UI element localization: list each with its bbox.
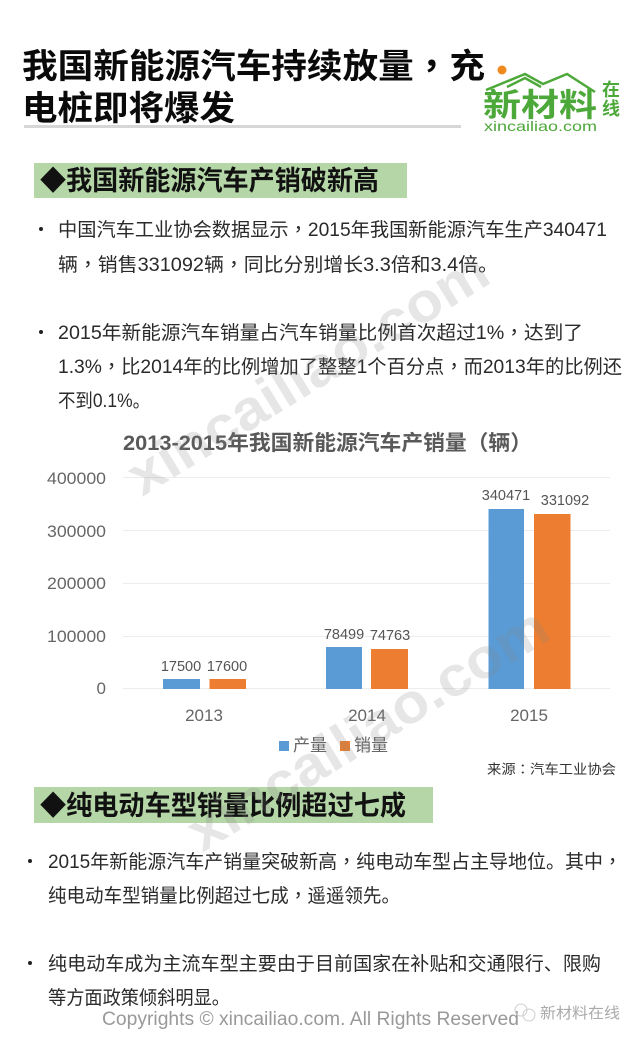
y axis labels: [47, 469, 106, 698]
data labels: 17500: [161, 659, 201, 675]
wechat source mark: 新材料在线: [540, 1005, 620, 1022]
data labels: [161, 488, 589, 675]
copyright footer: Copyrights © xincailiao.com. All Rights Reserved: [102, 1009, 519, 1030]
text block: market share: 1.3%，比2014年的比例增加了整整1个百分点，而2013年的比例还: [58, 352, 622, 379]
text block: market share: 2015年新能源汽车销量占汽车销量比例首次超过1% ，达到了: [58, 318, 583, 345]
section heading 2: ◆纯电动车型销量比例超过七成: [40, 791, 406, 821]
text block: policy reasons: 等方面政策倾斜明显。: [48, 987, 230, 1009]
data labels: 331092: [541, 493, 589, 509]
data labels: 74763: [370, 628, 410, 644]
watermark: [115, 238, 560, 863]
icon: logo roof: [486, 74, 595, 92]
x axis labels: 2015: [510, 706, 548, 725]
text block: production and sales: 辆，销售331092辆 ，同比分别增长3.3倍和3.4倍。: [58, 250, 498, 277]
bars: 销量: [210, 514, 570, 689]
icon: logo orange dot: [498, 66, 506, 74]
data labels: 78499: [324, 627, 364, 643]
title: 电桩即将爆发: [22, 90, 235, 128]
data labels: 17600: [207, 659, 247, 675]
y axis labels: 200000: [47, 574, 106, 593]
text block: production and sales: 中国汽车工业协会数据显示，2015年我国新能源汽车生产340471: [58, 215, 607, 242]
bars: 产量: [163, 509, 524, 689]
logo tagline: 在: [602, 80, 620, 100]
y axis labels: 100000: [47, 627, 106, 646]
text block: market share: [39, 318, 622, 412]
data labels: 340471: [482, 488, 530, 504]
y axis labels: 300000: [47, 522, 106, 541]
text block: market share: 不到0.1%。: [58, 390, 150, 412]
y axis labels: 400000: [47, 469, 106, 488]
logo name: 新材料: [483, 87, 597, 123]
x axis labels: [185, 706, 548, 725]
section heading 1: ◆我国新能源汽车产销破新高: [40, 166, 379, 196]
watermark: xincailiao.com: [115, 238, 500, 507]
legend: 销量: [354, 736, 388, 755]
legend: 产量: [293, 736, 327, 755]
text block: battery electric share: 2015年新能源汽车产销量突破新高，纯电动车型占主导地位。其中，: [48, 847, 622, 874]
text block: policy reasons: [28, 953, 601, 1009]
x axis labels: 2014: [348, 706, 386, 725]
logo: [483, 66, 620, 134]
icon: wechat bubbles: [515, 1004, 535, 1021]
title: 我国新能源汽车持续放量 ，充: [22, 39, 485, 88]
y axis labels: 0: [97, 679, 106, 698]
logo tagline: [602, 80, 620, 119]
text block: battery electric share: [28, 847, 622, 908]
logo tagline: 线: [602, 99, 620, 119]
logo url: xincailiao.com: [484, 118, 597, 134]
chart title: 2013-2015年我国新能源汽车产销量 （辆）: [123, 427, 532, 457]
watermark: xincailiao.com: [175, 594, 560, 863]
title underline: [24, 125, 461, 128]
bar chart: [47, 427, 616, 778]
text block: policy reasons: 纯电动车成为主流车型主要由于目前国家在补贴和交通限行、限购: [48, 953, 601, 975]
source note: 来源：汽车工业协会: [487, 758, 616, 778]
wechat source mark: [515, 1004, 620, 1022]
title: [22, 39, 485, 128]
x axis labels: 2013: [185, 706, 223, 725]
legend: [279, 736, 388, 755]
text block: battery electric share: 纯电动车型销量比例超过七成，遥遥领先。: [48, 881, 400, 908]
text block: production and sales: [39, 215, 607, 277]
